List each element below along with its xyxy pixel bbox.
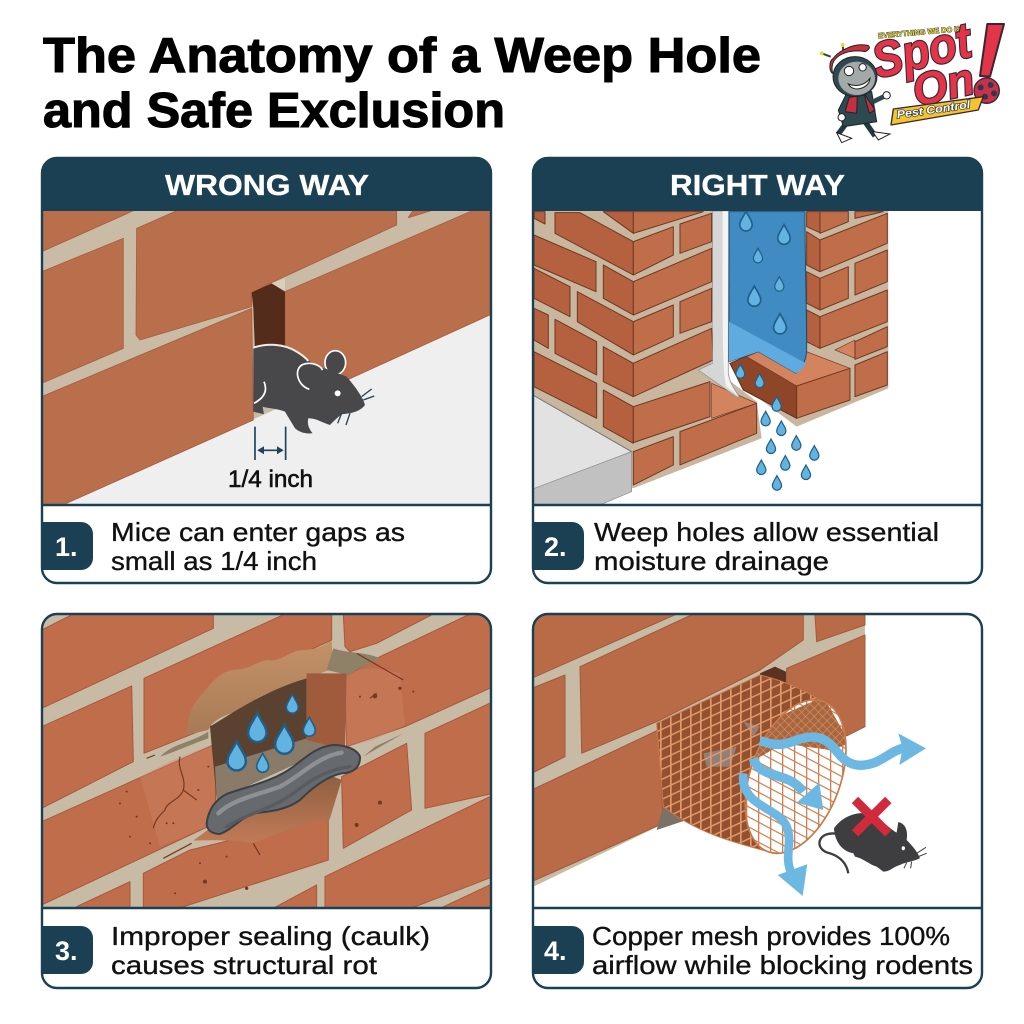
panel 4 background xyxy=(533,614,982,988)
exposed mortar xyxy=(327,648,380,675)
mortar xyxy=(40,610,500,910)
title xyxy=(43,29,761,138)
blue flashing xyxy=(729,212,807,373)
logo: Spot On Pest Control xyxy=(820,12,1004,143)
illustration: mouse entering a gap xyxy=(40,202,500,515)
gray flashing strip xyxy=(698,212,739,397)
measurement label: 1/4 inch xyxy=(228,466,313,493)
floor xyxy=(68,316,490,504)
panel: right way xyxy=(530,157,983,583)
panel: copper mesh xyxy=(530,610,983,988)
red x xyxy=(855,800,888,833)
right brick stack xyxy=(807,212,887,397)
water droplets xyxy=(227,694,315,772)
airflow arrows xyxy=(743,733,926,896)
caption 1: Mice can enter gaps as xyxy=(111,517,405,547)
illustration: copper mesh in weep hole xyxy=(530,610,927,896)
broken mortar joint xyxy=(160,732,403,757)
logo ladybug ball xyxy=(974,78,999,103)
caulk bead xyxy=(207,745,360,834)
caption 2: 2. xyxy=(544,532,567,562)
gap measurement xyxy=(255,427,286,460)
torn brick upper edge xyxy=(187,640,333,735)
wall opening xyxy=(252,278,285,352)
caption 4: Copper mesh provides 100% xyxy=(592,921,950,951)
water droplets xyxy=(736,211,819,490)
caption 4 xyxy=(532,921,973,980)
panel 3 outline xyxy=(41,614,492,988)
caption 4: 4. xyxy=(544,936,567,966)
title: and Safe Exclusion xyxy=(43,84,505,138)
logo mascot xyxy=(820,43,890,143)
panel 1 background xyxy=(42,158,491,583)
logo banner: Pest Control xyxy=(896,99,972,121)
logo wordmark Spot: Spot xyxy=(867,12,979,89)
illustration: caulked and rotting wall xyxy=(40,610,500,910)
mouse xyxy=(253,345,374,434)
mortar xyxy=(533,210,888,488)
caption 3: 3. xyxy=(55,936,78,966)
title: The Anatomy of a Weep Hole xyxy=(43,29,761,83)
caption 1: 1. xyxy=(55,532,78,562)
cavity xyxy=(210,673,347,800)
caption 3: Improper sealing (caulk) xyxy=(111,921,430,951)
header: wrong way xyxy=(41,157,492,211)
illustration: cavity wall with weep hole drainage xyxy=(530,210,888,505)
caption 3: causes structural rot xyxy=(111,950,378,980)
panel 3 background xyxy=(42,614,491,988)
logo wordmark On: On xyxy=(907,53,979,116)
weathered brick patches xyxy=(140,669,405,847)
concrete slab xyxy=(530,393,632,505)
logo exclamation xyxy=(980,24,1004,77)
panel 2 background xyxy=(533,158,982,583)
cracks and spalling xyxy=(147,653,403,858)
mesh tube xyxy=(656,674,847,854)
logo tagline: EVERYTHING WE DO IS xyxy=(878,24,962,40)
caption 4: airflow while blocking rodents xyxy=(592,950,973,980)
bricks xyxy=(42,614,493,910)
caption 2: Weep holes allow essential xyxy=(594,517,939,547)
panel 1 outline xyxy=(41,158,492,583)
brick wall xyxy=(40,202,500,503)
caption 2: moisture drainage xyxy=(594,546,829,576)
caption 3 xyxy=(41,921,430,980)
header: right way: RIGHT WAY xyxy=(670,170,845,202)
panel 2 outline xyxy=(532,158,983,583)
panel: wrong way xyxy=(40,157,500,583)
panel 4 outline xyxy=(532,614,983,988)
caption 2 xyxy=(532,517,939,576)
blocked mouse xyxy=(819,813,927,873)
torn brick lower edge xyxy=(193,777,342,843)
sill brick xyxy=(730,352,850,418)
brick wall xyxy=(530,610,865,888)
logo banner xyxy=(891,97,983,125)
panel: improper sealing xyxy=(40,610,500,988)
header: wrong way: WRONG WAY xyxy=(165,170,369,202)
caption 1: small as 1/4 inch xyxy=(111,546,317,576)
left brick stack xyxy=(534,212,757,485)
header: right way xyxy=(532,157,983,211)
caption 1 xyxy=(41,517,405,576)
